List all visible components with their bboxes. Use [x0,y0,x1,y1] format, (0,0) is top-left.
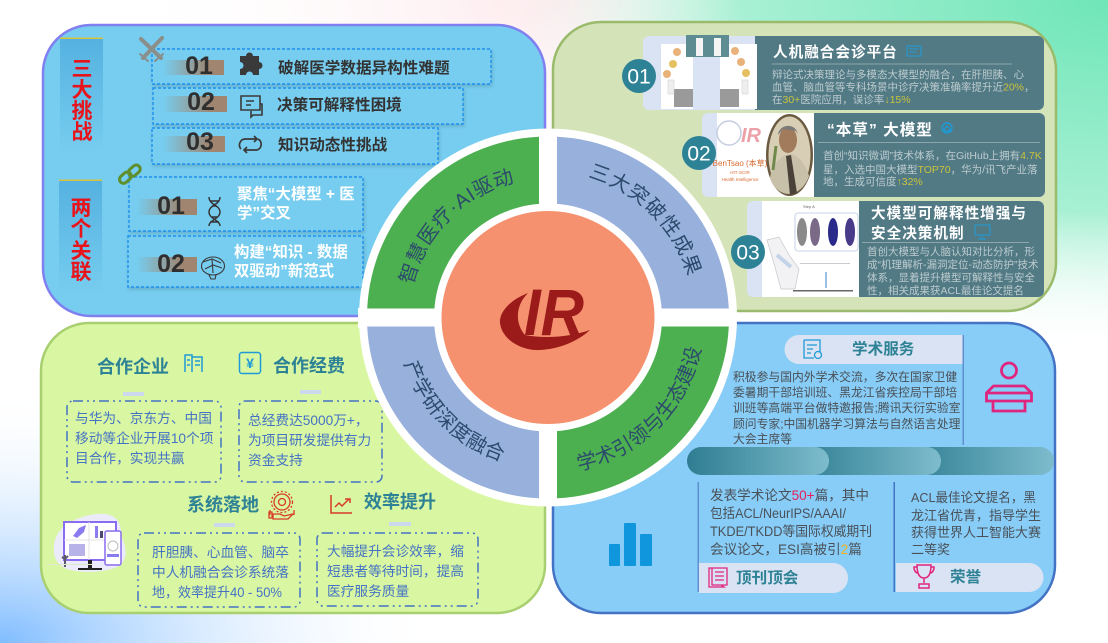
block: honors: 荣誉 [950,568,982,586]
block: academic service: 顾问专家;中国机器学习算法与自然语言处理 [733,417,961,431]
block: partner enterprises: 与华为、京东方、中国 [75,411,212,426]
link row 02 [128,236,363,287]
block: efficiency gains: 大幅提升会诊效率，缩 [327,543,464,559]
banner: two links: 关 [70,240,92,263]
logo: IR: IR [524,275,584,349]
block: cooperation funding: 合作经费 [273,355,345,376]
challenge row 03: 03 [186,128,214,156]
block: top journals and conferences: 包括ACL/NeurIPS/AAAI/ [710,506,846,521]
block: cooperation funding: 总经费达5000万+， [248,413,369,428]
segment: three breakthroughs [557,136,729,308]
block: system deployment: 地，效率提升40 - 50% [152,584,282,600]
icon: speaker at podium [986,363,1032,411]
icon: dna [209,197,220,226]
card 03: explainability and safety: 体系，显着提升模型可解释性与安全 [867,271,1035,284]
card 02: BenTsao model: 地，生成可信度↑32% [823,175,923,188]
icon: building [185,355,202,372]
center circle [442,211,654,424]
card 01: human-machine consultation platform: 人机融合会诊平台 [773,43,898,61]
segment: three breakthroughs: 三大突破性成果 [589,164,702,276]
challenge row 02 [153,88,463,124]
card 02: BenTsao model: “本草” 大模型 [827,121,933,139]
block: system deployment [138,492,300,607]
link row 01: 01 [157,192,185,220]
block: academic service: 学术服务 [852,339,915,358]
image: BenTsao logo and portrait: HIT·SCIR [730,170,750,175]
segment: industry-university-research: 产学研深度融合 [403,360,504,462]
challenge row 01: 01 [185,52,213,80]
image: BenTsao logo and portrait: BenTsao (本草) [713,158,768,168]
block: cooperation funding: 资金支持 [248,453,303,468]
icon: yen box [240,352,260,374]
icon: monitor [975,225,990,239]
segment: industry-university-research [367,326,539,498]
block: honors: 二等奖 [911,542,950,557]
banner: three challenges [60,38,103,153]
card 03: explainability and safety [731,201,1044,297]
block: top journals and conferences: 顶刊顶会 [736,568,799,587]
block: academic service [733,335,964,446]
block: honors [894,482,1044,592]
image: BenTsao logo and portrait: IR [741,125,762,147]
link row 01 [129,177,363,231]
challenge row 01: 破解医学数据异构性难题 [278,58,450,77]
block: academic service: 委暑期干部培训班、黑龙江省疾控局干部培 [733,386,957,400]
card 03: explainability and safety: 性，相关成果获ACL最佳论文提名 [867,284,1024,297]
block: top journals and conferences: 发表学术论文50+篇，其中 [710,488,869,503]
challenge row 03: 知识动态性挑战 [278,135,388,154]
badge 02 [682,136,716,170]
image: doctors illustration [661,35,757,110]
block: partner enterprises [67,355,221,482]
badge 01 [622,59,656,93]
image: brain scan figure [762,201,859,297]
card 01: human-machine consultation platform: 在30+医院应用，误诊率↓15% [772,93,911,106]
block: honors: 龙江省优青，指导学生 [911,508,1041,523]
link row 01: 学”交叉 [237,203,291,222]
block: cooperation funding [239,352,382,482]
block: efficiency gains: 医疗服务质量 [327,584,409,599]
block: partner enterprises: 移动等企业开展10个项 [75,430,214,446]
panel: challenges and links [43,25,545,316]
block: system deployment: 肝胆胰、心血管、脑卒 [152,545,289,560]
banner: two links: 两 [70,197,92,220]
icon: puzzle [240,53,262,75]
card 02: BenTsao model: 首创“知识微调”技术体系，在GitHub上拥有4.7K [823,149,1042,162]
block: top journals and conferences: 会议论文，ESI高被引2篇 [710,541,862,557]
segment: academic leadership [557,326,729,498]
icon: scroll book [709,568,727,587]
segment: smart healthcare: 智慧医疗·AI驱动 [398,168,513,282]
card 01: human-machine consultation platform: 辩论式决策理论与多模态大模型的融合，在肝胆胰、心 [772,68,1024,81]
block: efficiency gains [317,491,478,606]
banner: three challenges: 战 [72,121,92,144]
icon: crossed swords [140,38,163,61]
link row 02: 双驱动”新范式 [234,261,335,280]
banner: two links [59,180,102,295]
block: academic service: 训班等高端平台做特邀报告;腾讯天衍实验室 [733,401,961,415]
segment: academic leadership: 学术引领与生态建设 [577,347,702,471]
card 03: explainability and safety: 大模型可解释性增强与 [871,204,1027,222]
block: academic service: 大会主席等 [733,432,792,446]
image: brain scan figure: Step A [803,204,815,209]
banner: three challenges: 三 [72,58,92,81]
icon: gear and hand [269,492,294,519]
block: honors: 获得世界人工智能大赛 [911,525,1041,540]
challenge row 02: 决策可解释性困境 [277,95,402,114]
card 03: explainability and safety: 成“机理解析-漏洞定位-动态防护”技术 [867,258,1039,271]
panel: academic leadership [553,323,1055,613]
icon: bar chart [609,523,652,566]
card 02: BenTsao model [682,113,1045,197]
card 02: BenTsao model: 星，入选中国大模型TOP70，华为/讯飞产业落 [823,163,1038,176]
banner: three challenges: 大 [72,79,92,102]
banner: two links: 联 [70,261,92,284]
block: efficiency gains: 效率提升 [364,491,436,512]
icon: brain network [202,257,224,279]
illustration: dashboard monitor [47,514,126,572]
image: BenTsao logo and portrait [713,113,814,197]
icon: chain link [118,163,142,185]
icon: yen box: ¥ [246,355,254,371]
badge 02: 02 [687,142,711,166]
banner: two links: 个 [70,218,92,241]
link row 02: 02 [157,250,185,278]
block: academic service: 积极参与国内外学术交流，多次在国家卫健 [733,370,957,384]
central wheel [358,128,737,506]
link row 01: 聚焦“大模型 + 医 [237,184,355,203]
icon: trend chart [331,495,352,513]
block: partner enterprises: 合作企业 [97,356,169,377]
block: honors: ACL最佳论文提名，黑 [911,490,1036,505]
block: system deployment: 中人机融合会诊系统落 [152,565,289,580]
block: top journals and conferences [698,482,872,593]
block: system deployment: 系统落地 [187,494,259,515]
challenge row 02: 02 [187,88,215,116]
segment: smart healthcare [367,136,539,308]
card 03: explainability and safety: 安全决策机制 [871,224,965,242]
badge 03 [731,235,765,269]
challenge row 03 [152,128,438,164]
block: top journals and conferences: TKDE/TKDD等国际权威期刊 [710,523,872,539]
icon: trophy [914,565,934,588]
icon: loop [239,136,261,153]
badge 03: 03 [736,242,760,264]
icon: circle mark [942,123,952,133]
block: cooperation funding: 为项目研发提供有力 [248,433,371,448]
panel: industry cooperation [41,323,545,613]
banner: three challenges: 挑 [72,100,92,123]
block: partner enterprises: 目合作，实现共赢 [75,450,185,466]
icon: chat [241,96,262,117]
image: BenTsao logo and portrait: Health Intelligence [721,177,759,182]
band divider [687,447,1054,475]
card 03: explainability and safety: 首创大模型与人脑认知对比分析，形 [867,245,1035,258]
card 01: human-machine consultation platform [622,35,1044,110]
block: efficiency gains: 短患者等待时间，提高 [327,563,464,579]
icon: certificate [804,340,822,358]
card 01: human-machine consultation platform: 血管、脑血管等专科场景中诊疗决策准确率提升近20%， [772,80,1035,94]
badge 01: 01 [627,66,651,88]
panel: breakthrough results [553,22,1056,311]
icon: slides [907,46,921,56]
link row 02: 构建“知识 - 数据 [234,242,348,261]
challenge row 01 [152,49,491,84]
